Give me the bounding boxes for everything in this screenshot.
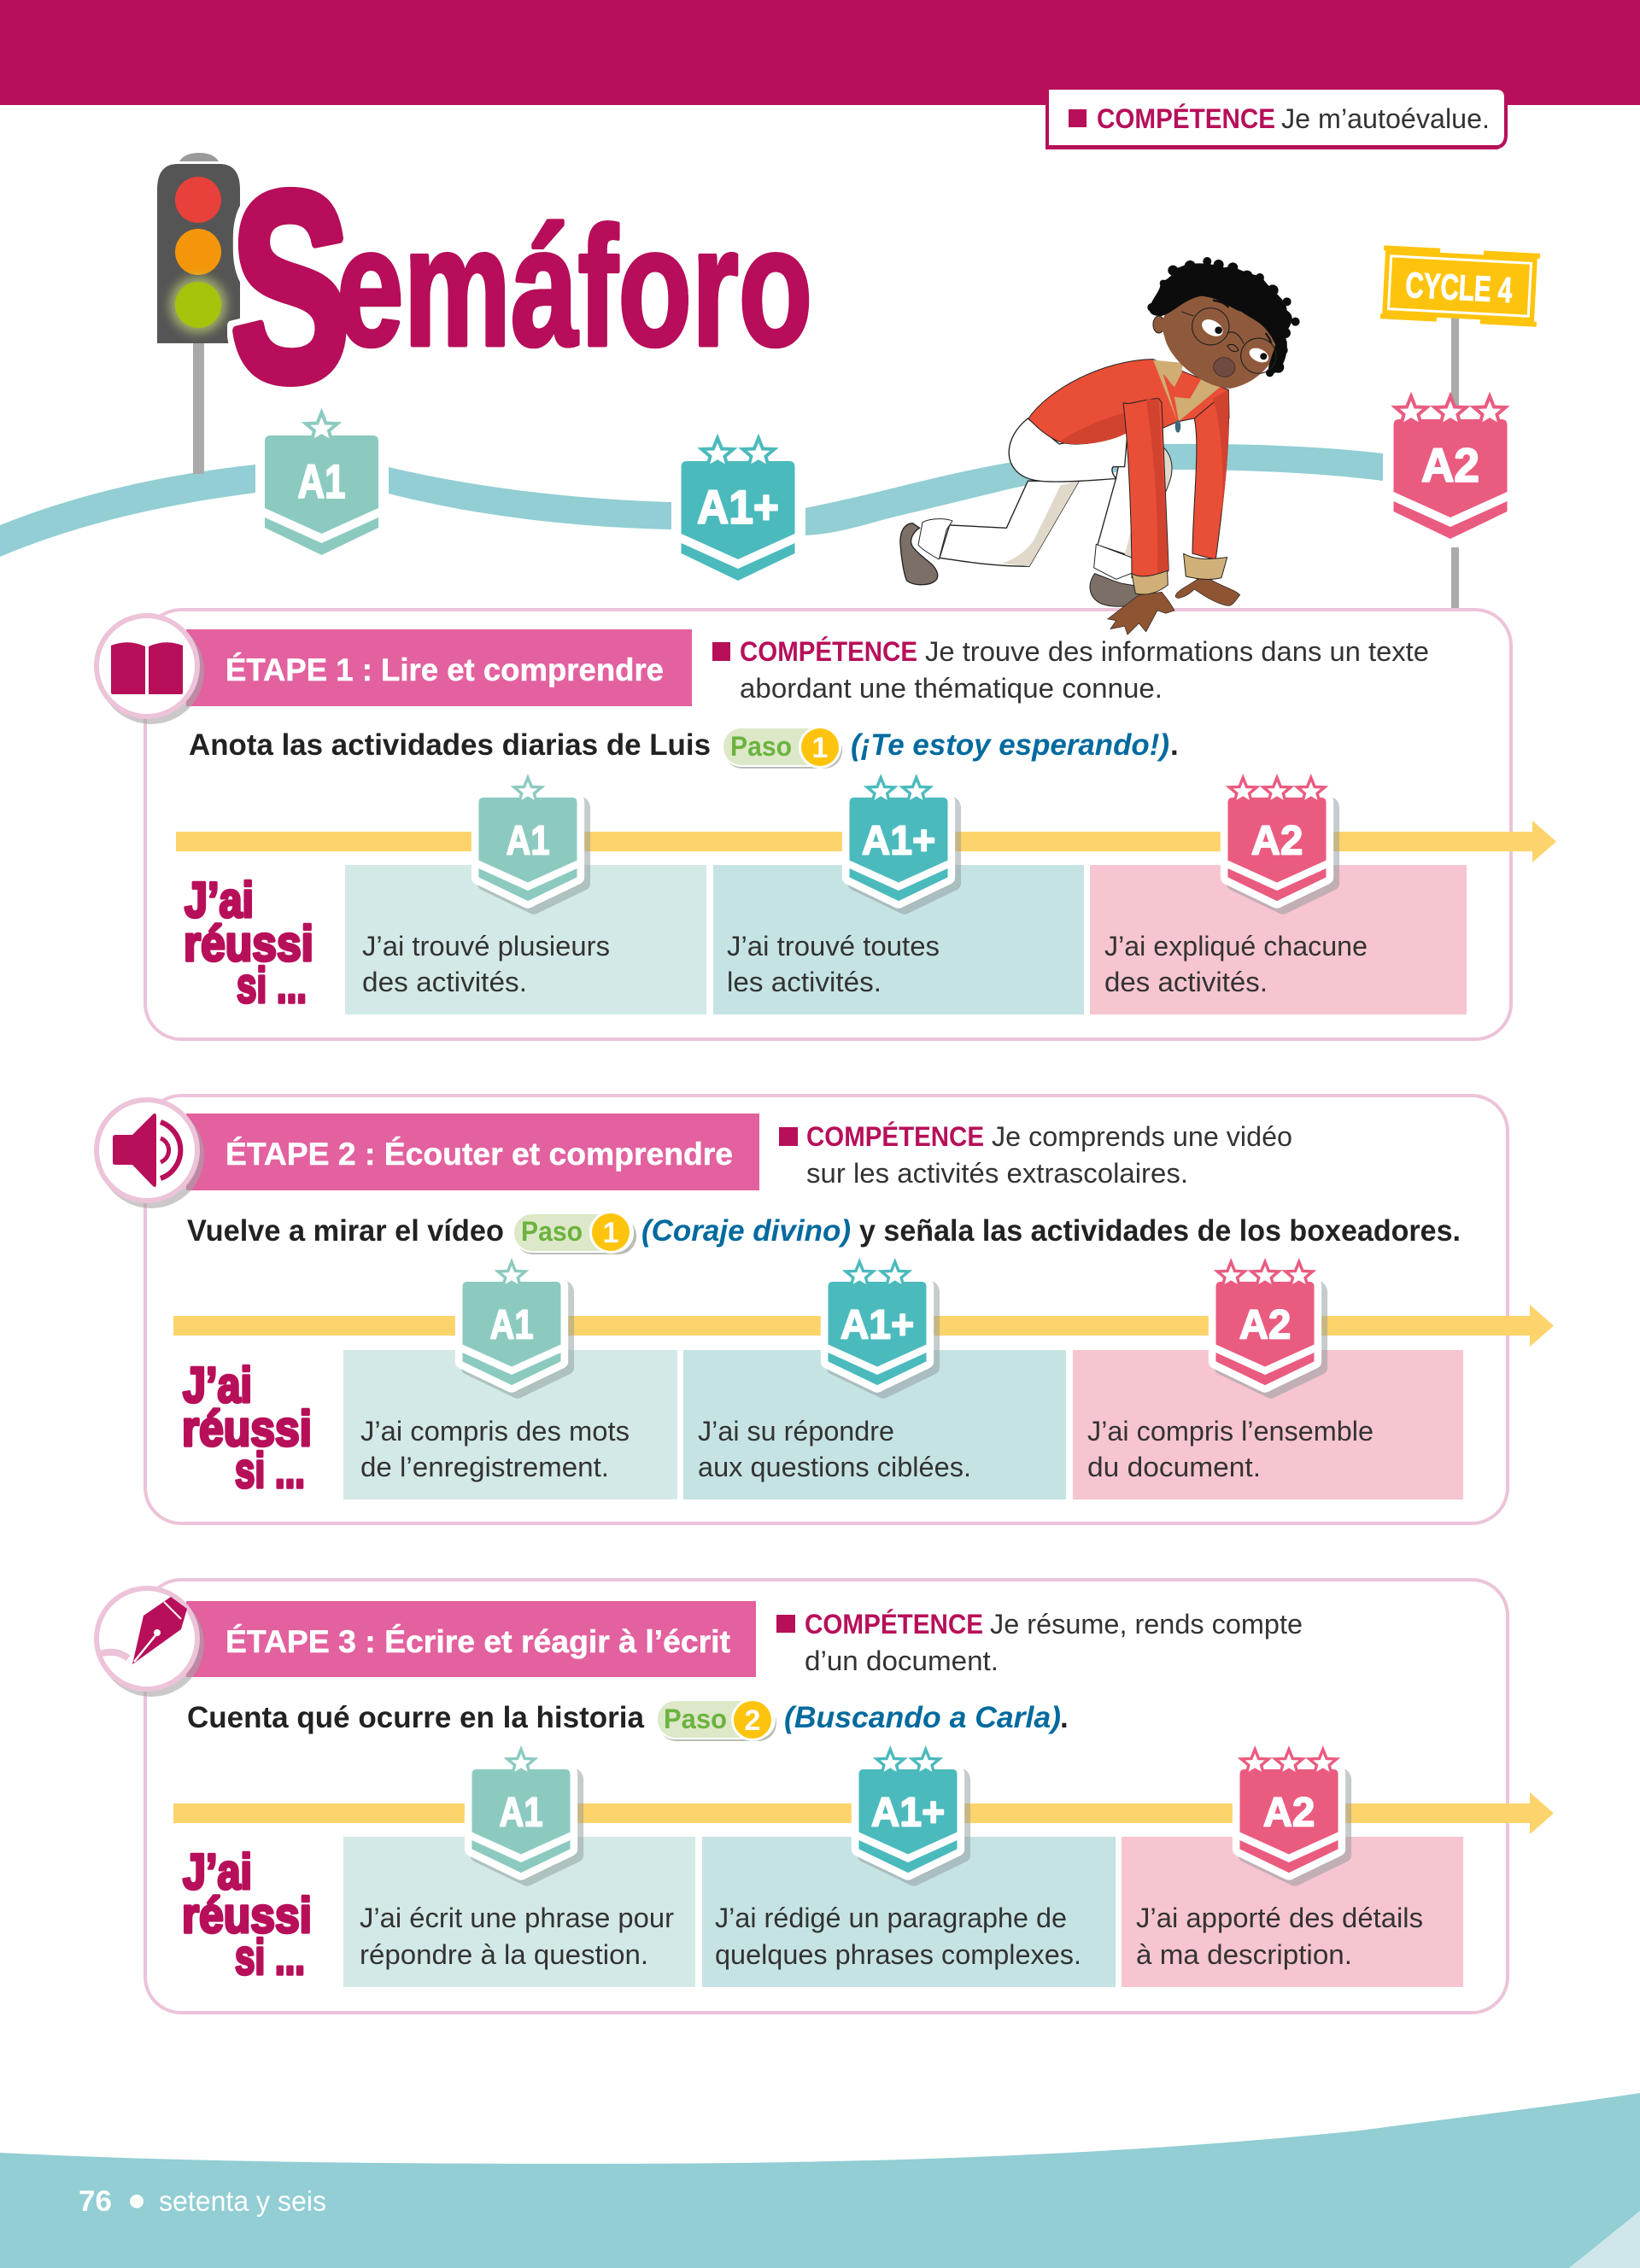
panel 2 instruction: (Coraje divino) bbox=[641, 1214, 851, 1248]
left arm bbox=[1123, 399, 1168, 578]
front leg shadow bbox=[1125, 498, 1162, 558]
panel 1 instruction bbox=[189, 726, 1179, 769]
tab: competence autoevaluation bbox=[1046, 88, 1506, 149]
panel 1 badge A1 bbox=[478, 778, 583, 907]
tab: competence autoevaluation: Je m’autoévalue. bbox=[1281, 103, 1490, 134]
panel 3 instruction: . bbox=[1060, 1701, 1069, 1734]
panel 1 competence text bbox=[712, 636, 1429, 704]
eyebrows and nose bbox=[1213, 301, 1271, 352]
panel 1 criteria text: des activités. bbox=[362, 967, 527, 997]
panel 3 instruction: 2 bbox=[745, 1704, 760, 1737]
panel 2 competence text: COMPÉTENCE bbox=[806, 1121, 984, 1152]
panel 2 badge A2: A2 bbox=[1239, 1302, 1291, 1348]
panel 2 progress arrow bbox=[173, 1305, 1554, 1347]
panel 2 badge A2 bbox=[1215, 1262, 1320, 1391]
page number: setenta y seis bbox=[159, 2185, 326, 2217]
sweater body bbox=[1028, 359, 1229, 444]
panel 2 header bar: ÉTAPE 2 : Écouter et comprendre bbox=[226, 1137, 733, 1172]
panel 3 criteria text: J’ai écrit une phrase pour bbox=[360, 1903, 674, 1933]
panel 3 instruction bbox=[187, 1698, 1069, 1741]
panel 1 circle icon: open book bbox=[97, 616, 204, 724]
panel 1 J'ai réussi si: si ... bbox=[237, 958, 307, 1014]
pole: cycle sign to A2 bbox=[1451, 312, 1459, 609]
panel 2 J'ai réussi si: J’ai bbox=[183, 1358, 252, 1413]
page number: 76 bbox=[79, 2185, 112, 2218]
panel: étape 2 bbox=[97, 1096, 1554, 1523]
panel 3 J'ai réussi si: J’ai bbox=[183, 1844, 252, 1900]
panel 1 criteria text: les activités. bbox=[727, 967, 882, 997]
panel 1 instruction: Paso bbox=[730, 731, 792, 762]
panel 3 badge A2: A2 bbox=[1263, 1790, 1315, 1836]
panel 2 instruction bbox=[187, 1211, 1461, 1254]
panel 3 competence text bbox=[776, 1609, 1303, 1676]
panel 3 header bar bbox=[186, 1601, 756, 1677]
right arm shadow bbox=[1213, 390, 1229, 515]
panel 2 criteria text bbox=[360, 1416, 1374, 1482]
sign: cycle 4 bbox=[1380, 245, 1540, 327]
panel 3 competence text: Je résume, rends compte bbox=[990, 1609, 1303, 1640]
panel 1 criteria text: J’ai trouvé toutes bbox=[727, 931, 940, 962]
panel 1 header bar: ÉTAPE 1 : Lire et comprendre bbox=[226, 652, 664, 687]
panel: étape 1 bbox=[97, 610, 1556, 1039]
panel 3 competence text: COMPÉTENCE bbox=[805, 1609, 983, 1640]
panel 1 competence text: abordant une thématique connue. bbox=[740, 673, 1163, 704]
panel 1 badge A1+: A1+ bbox=[862, 818, 935, 864]
panel 3 badge A1+ bbox=[858, 1750, 963, 1879]
panel 3 criteria text: J’ai rédigé un paragraphe de bbox=[715, 1903, 1067, 1933]
front shoe bbox=[1090, 574, 1140, 606]
illustration: child in starting position bbox=[900, 257, 1300, 634]
icon: traffic light bbox=[157, 153, 240, 474]
footer corner bbox=[1569, 2211, 1640, 2268]
front cuff bbox=[1094, 544, 1136, 579]
panel 2 J'ai réussi si bbox=[182, 1358, 312, 1499]
knee shadow bbox=[1159, 444, 1172, 502]
panel 2 badge A1+: A1+ bbox=[840, 1302, 914, 1348]
panel 1 criteria text bbox=[362, 931, 1368, 997]
panel 3 instruction: Paso bbox=[664, 1704, 727, 1734]
page number bbox=[79, 2185, 326, 2218]
title bbox=[231, 137, 812, 436]
panel: étape 3 bbox=[97, 1580, 1554, 2013]
panel 1 instruction: 1 bbox=[812, 732, 828, 764]
panel 2 criteria text: J’ai compris des mots bbox=[360, 1416, 630, 1447]
wave path bbox=[0, 444, 1383, 557]
right cuff bbox=[1184, 553, 1227, 579]
sweater shadow bbox=[1059, 412, 1128, 444]
eyes bbox=[1199, 316, 1271, 365]
panel 3 badge A1 bbox=[472, 1750, 576, 1879]
hair bbox=[1147, 257, 1300, 377]
title: emáforo bbox=[337, 192, 812, 381]
left hand bbox=[1108, 592, 1174, 634]
rear leg shadow bbox=[1002, 481, 1079, 566]
panel 1 badge A2 bbox=[1227, 778, 1332, 907]
panel 2 J'ai réussi si: réussi bbox=[182, 1401, 312, 1457]
panel 2 frame bbox=[145, 1096, 1508, 1523]
neck bbox=[1174, 373, 1204, 399]
panel 1 badge A1: A1 bbox=[506, 818, 550, 864]
panel 1 progress arrow bbox=[176, 821, 1556, 862]
panel 1 criteria text: J’ai expliqué chacune bbox=[1104, 931, 1368, 962]
panel 1 instruction: . bbox=[1170, 728, 1179, 762]
panel 2 badge A1+ bbox=[828, 1262, 932, 1391]
front leg bbox=[1098, 433, 1170, 558]
panel 3 criteria text: à ma description. bbox=[1136, 1939, 1352, 1970]
panel 3 J'ai réussi si bbox=[182, 1844, 312, 1985]
panel 3 badge A1: A1 bbox=[499, 1790, 543, 1836]
right hand bbox=[1175, 579, 1240, 605]
panel 3 criteria text: J’ai apporté des détails bbox=[1136, 1903, 1423, 1933]
back shoe bbox=[900, 523, 938, 585]
panel 1 instruction: (¡Te estoy esperando!) bbox=[851, 728, 1169, 762]
badge: A1 large bbox=[265, 412, 378, 555]
panel 2 instruction: 1 bbox=[603, 1217, 618, 1249]
ear bbox=[1153, 316, 1164, 333]
panel 2 criteria text: J’ai su répondre bbox=[698, 1416, 894, 1447]
panel 2 criteria text: de l’enregistrement. bbox=[360, 1452, 609, 1482]
panel 3 criteria text: quelques phrases complexes. bbox=[715, 1939, 1081, 1970]
title: S bbox=[231, 137, 350, 436]
face bbox=[1162, 293, 1277, 389]
panel 2 badge A1: A1 bbox=[489, 1302, 534, 1348]
panel 3 circle icon: fountain pen bbox=[97, 1588, 204, 1697]
panel 1 frame bbox=[145, 610, 1511, 1039]
panel 1 badge A2: A2 bbox=[1251, 818, 1303, 864]
left cuff bbox=[1132, 570, 1168, 594]
panel 1 J'ai réussi si: réussi bbox=[184, 916, 313, 972]
badge: A1+ large bbox=[682, 438, 794, 581]
panel 2 circle icon: speaker bbox=[97, 1100, 204, 1208]
panel 2 criteria text: aux questions ciblées. bbox=[698, 1452, 971, 1482]
panel 3 header bar: ÉTAPE 3 : Écrire et réagir à l’écrit bbox=[226, 1624, 730, 1659]
panel 1 J'ai réussi si: J’ai bbox=[184, 873, 254, 928]
panel 3 criteria boxes bbox=[343, 1837, 1463, 1987]
panel 3 badge A2 bbox=[1239, 1750, 1344, 1879]
white shirt bbox=[1174, 397, 1190, 418]
panel 1 criteria text: des activités. bbox=[1104, 967, 1268, 997]
panel 3 badge A1+: A1+ bbox=[871, 1790, 945, 1836]
panel 3 instruction: Cuenta qué ocurre en la historia bbox=[187, 1701, 645, 1734]
footer wave bbox=[0, 2093, 1640, 2268]
panel 2 competence text bbox=[779, 1121, 1292, 1189]
left arm shadow bbox=[1146, 399, 1168, 575]
tab: competence autoevaluation: COMPÉTENCE bbox=[1097, 103, 1275, 134]
badge: A1 large: A1 bbox=[297, 454, 345, 508]
panel 2 competence text: Je comprends une vidéo bbox=[992, 1121, 1292, 1152]
panel 1 header bar bbox=[186, 629, 692, 706]
panel 1 criteria boxes bbox=[345, 865, 1467, 1014]
white gap behind large A2 bbox=[1384, 410, 1516, 547]
panel 2 criteria text: du document. bbox=[1087, 1452, 1261, 1482]
panel 1 badge A1+ bbox=[849, 778, 953, 907]
panel 2 instruction: Paso bbox=[521, 1216, 583, 1247]
sign: cycle 4: CYCLE 4 bbox=[1404, 265, 1514, 310]
panel 2 criteria boxes bbox=[343, 1350, 1463, 1499]
pendant bbox=[1175, 420, 1180, 433]
panel 1 competence text: Je trouve des informations dans un texte bbox=[925, 636, 1429, 667]
panel 2 competence text: sur les activités extrascolaires. bbox=[806, 1158, 1188, 1189]
panel 1 instruction: Anota las actividades diarias de Luis bbox=[189, 728, 711, 762]
panel 1 criteria text: J’ai trouvé plusieurs bbox=[362, 931, 610, 962]
panel 2 badge A1 bbox=[462, 1262, 566, 1391]
panel 3 progress arrow bbox=[173, 1792, 1554, 1834]
rear leg bbox=[940, 481, 1079, 566]
panel 2 criteria text: J’ai compris l’ensemble bbox=[1087, 1416, 1374, 1447]
badge: A2 large bbox=[1394, 396, 1507, 539]
panel 2 instruction: Vuelve a mirar el vídeo bbox=[187, 1214, 504, 1248]
panel 1 competence text: COMPÉTENCE bbox=[740, 636, 917, 667]
panel 2 header bar bbox=[186, 1114, 759, 1190]
rear cuff bbox=[918, 519, 952, 559]
panel 3 frame bbox=[145, 1580, 1508, 2013]
right arm bbox=[1192, 390, 1229, 559]
right collar bbox=[1174, 378, 1220, 421]
panel 2 J'ai réussi si: si ... bbox=[235, 1443, 305, 1499]
panel 3 criteria text: répondre à la question. bbox=[360, 1939, 648, 1970]
left collar bbox=[1153, 360, 1183, 421]
badge: A2 large: A2 bbox=[1421, 438, 1479, 492]
panel 2 instruction: y señala las actividades de los boxeadores. bbox=[859, 1214, 1461, 1248]
top magenta band bbox=[0, 0, 1640, 105]
badge: A1+ large: A1+ bbox=[697, 480, 779, 534]
panel 3 criteria text bbox=[360, 1903, 1423, 1970]
mouth bbox=[1212, 356, 1237, 378]
panel 3 J'ai réussi si: si ... bbox=[235, 1930, 305, 1985]
panel 3 instruction: (Buscando a Carla) bbox=[784, 1701, 1061, 1734]
panel 3 J'ai réussi si: réussi bbox=[182, 1888, 312, 1944]
panel 1 J'ai réussi si bbox=[184, 873, 313, 1014]
hip bbox=[1009, 418, 1128, 482]
glasses bbox=[1181, 308, 1276, 373]
panel 3 competence text: d’un document. bbox=[805, 1645, 999, 1676]
